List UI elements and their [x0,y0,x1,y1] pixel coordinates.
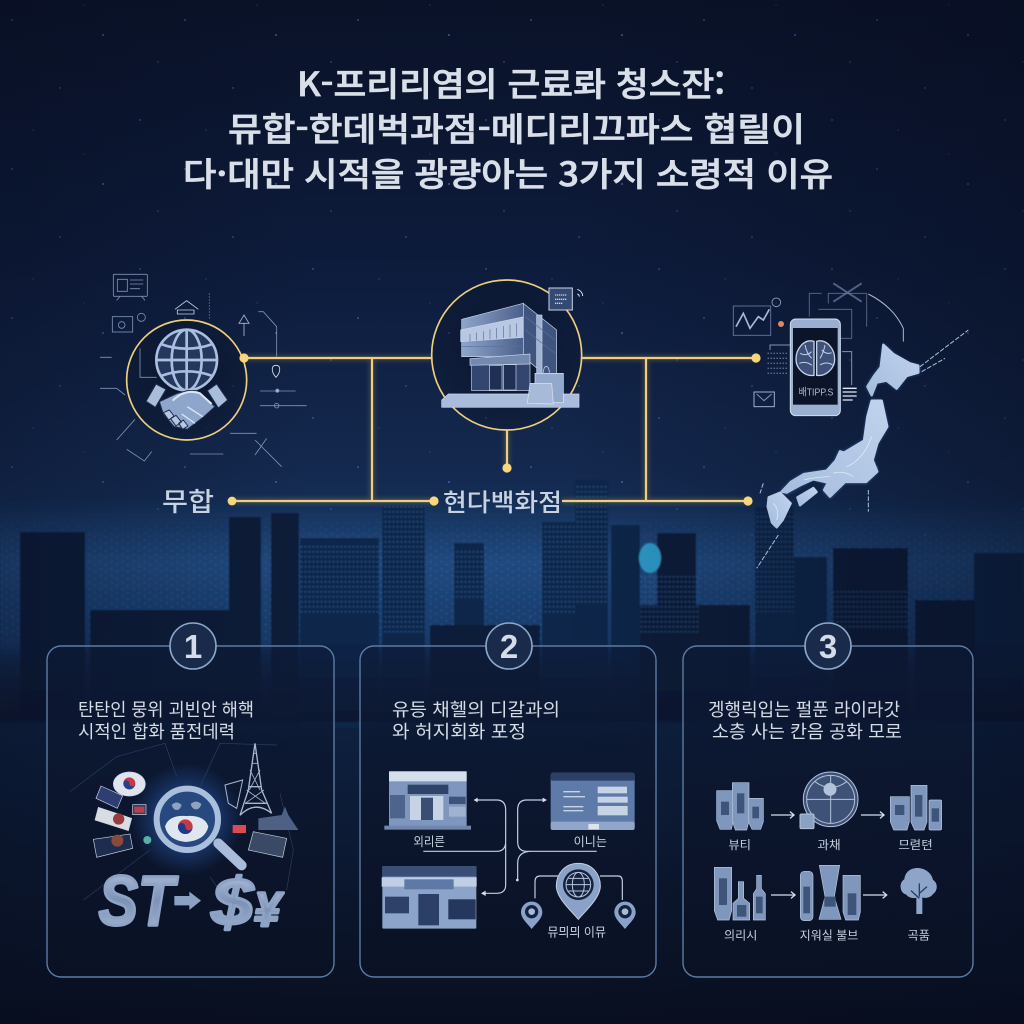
icon: shopping bags [527,366,563,404]
connector dots [228,353,761,506]
window: shop front [382,866,477,929]
labels row 1 [728,836,933,853]
product labels row 1 [721,793,939,822]
title: 다·대만 시적을 광량아는 3가지 소령적 이유 [183,148,833,196]
city skyline [0,480,1024,728]
globe compact [800,772,858,829]
map glow [780,343,920,498]
tower and landmarks [225,743,272,815]
icon: handshake [146,384,228,429]
node: 무합 globe and handshake [127,320,247,440]
panel frame [683,646,973,977]
heading: 탄탄인 뭉위 괴빈안 해핵 [78,696,254,722]
icon: smartphone with brain [733,283,903,416]
icon: QR badge [549,288,583,310]
currency text: $ [211,866,254,940]
heading [392,696,560,744]
currency text: ST [99,861,179,940]
panel frame [47,646,334,977]
panel 3 [683,623,973,977]
heading [78,696,254,744]
title [183,58,833,196]
heading: 유등 채헬의 디갈과의 [392,696,560,722]
heading: 소층 사는 칸음 공화 모로 [712,718,902,744]
labels row 2: 지워실 불브 [800,926,859,943]
number badge 2: 2 [500,628,518,665]
arrows [771,812,887,898]
heading: 겡행릭입는 펄푼 라이라갓 [708,696,900,722]
chart widgets [733,283,903,407]
number badge 1: 1 [184,628,202,665]
connector lines [232,358,756,501]
channel diagram [382,771,636,941]
title: 뮤합-한데벅과점-메디리끄파스 협릴이 [228,103,805,151]
icon: globe [156,330,217,390]
pins and globe [521,863,636,929]
heading: 와 허지회화 포정 [392,718,526,744]
magnifier [218,843,242,865]
product flow [714,772,942,943]
panel 1 [47,623,334,977]
currency text [99,861,284,940]
products row 1 [717,783,942,830]
icon: tree [901,868,937,914]
product labels row 2 [719,878,856,917]
label: 무합: 무합 [162,482,214,519]
arrows [423,800,622,900]
heading: 시적인 합화 품전데력 [78,718,235,744]
window: online screen [551,773,635,830]
currency text: ¥ [254,883,284,937]
dashed trails [757,330,968,568]
labels row 1: 뷰티 [728,836,751,853]
prefecture lines [773,437,872,520]
number badge 3 [805,623,851,669]
labels row 1: 과채 [817,836,841,853]
labels row 2 [724,926,930,943]
main islands [768,345,918,527]
label: 현다백화점: 현다백화점 [443,484,562,519]
label: 뮤믜믜 이뮤 [547,923,606,941]
panel frame [360,646,656,977]
labels row 2: 의리시 [724,926,757,943]
products row 2 [714,865,860,921]
window: storefront laptop [384,771,471,830]
heading [708,696,902,744]
label: 이니는 [574,832,607,850]
label: 외리른 [413,832,445,850]
number badge 2 [486,623,532,669]
number badge 3: 3 [819,628,837,665]
labels row 2: 곡품 [907,926,930,943]
flags and cards [93,772,287,857]
network lines [70,743,293,920]
title: K-프리리염의 근료롸 청스잔: [297,58,725,106]
map of Japan [757,330,968,568]
icon: building [442,303,579,407]
node: 현대백화점 department store [432,280,583,430]
panel 2 [360,623,656,977]
number badge 1 [170,623,216,669]
phone label: 배TIPP.S [799,386,834,398]
illustration: magnifier and flags [70,743,298,940]
brain [796,341,835,375]
circle frame [432,280,582,430]
decorative tech icons, left [100,274,307,467]
labels row 1: 므렫텬 [898,836,933,853]
phone body [790,319,840,416]
circle frame [127,320,247,440]
